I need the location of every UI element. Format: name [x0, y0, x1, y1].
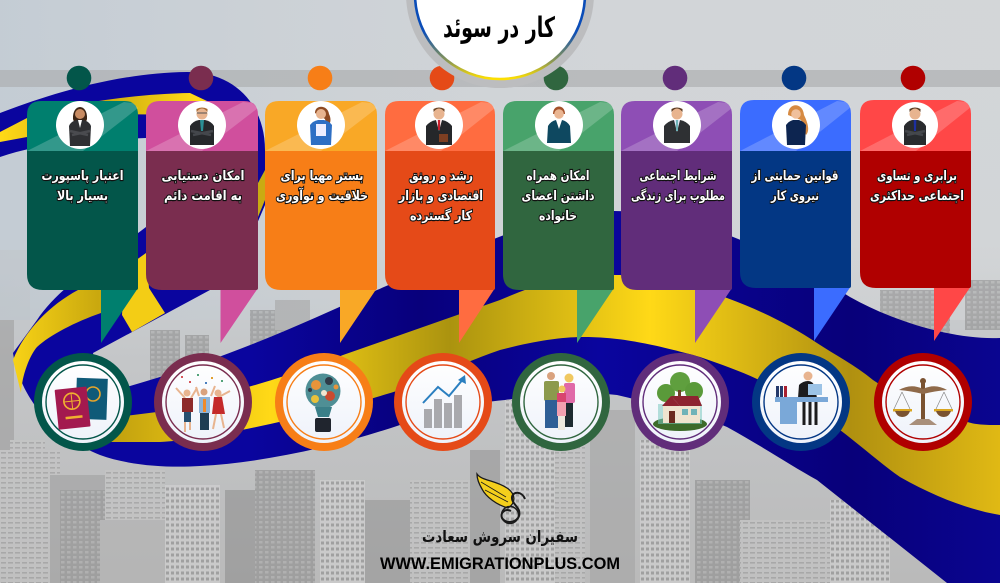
avatar	[178, 101, 226, 149]
background: city skyline	[0, 250, 1000, 583]
label: اعتبار پاسپورت	[42, 169, 124, 184]
avatar	[535, 101, 583, 149]
title badge	[406, 0, 594, 88]
label	[631, 169, 725, 204]
icon circle: idea lightbulb	[275, 353, 373, 451]
card 6: social conditions	[621, 101, 732, 343]
card 8: social equality	[860, 100, 971, 341]
card 1: passport credibility	[27, 101, 138, 343]
label	[870, 169, 964, 204]
icon circle: family	[512, 353, 610, 451]
label: خانواده	[539, 209, 577, 224]
label: به اقامت دائم	[164, 189, 242, 204]
label: مطلوب برای زندگی	[631, 188, 725, 204]
icon circle: passports	[34, 353, 132, 451]
label	[398, 169, 483, 224]
avatar	[297, 101, 345, 149]
gray timeline bar	[0, 70, 1000, 87]
avatar	[892, 102, 938, 148]
label: اقتصادی و بازار	[398, 189, 483, 204]
label: کار گسترده	[410, 208, 472, 224]
icon circle: growth chart	[394, 353, 492, 451]
title: کار در سوئد	[443, 11, 555, 44]
label	[751, 169, 838, 204]
label: بستر مهیا برای	[280, 169, 364, 184]
icon circle: house and trees	[631, 353, 729, 451]
ribbon: yellow right of lobe	[258, 170, 265, 217]
avatar	[56, 101, 104, 149]
avatar	[415, 101, 463, 149]
label	[522, 169, 595, 224]
label: امکان همراه	[526, 169, 590, 184]
icon circle: scales of justice	[874, 353, 972, 451]
label: داشتن اعضای	[522, 189, 595, 204]
label	[276, 169, 368, 204]
label: شرایط اجتماعی	[640, 169, 716, 184]
card 7: labor protection laws	[740, 100, 851, 341]
card 3: creativity and innovation	[265, 101, 377, 343]
ribbon: yellow fold	[122, 253, 165, 332]
icon circle: celebrating people	[154, 353, 252, 451]
label: بسیار بالا	[57, 189, 108, 204]
ribbon: yellow main stripe	[110, 275, 1000, 515]
card 4: economic growth	[385, 101, 495, 343]
label: خلاقیت و نوآوری	[276, 187, 368, 204]
icon circle: office worker	[752, 353, 850, 451]
timeline dots	[67, 66, 925, 90]
label: رشد و رونق	[409, 169, 473, 184]
avatar	[653, 101, 701, 149]
label	[162, 169, 244, 204]
label: اجتماعی حداکثری	[870, 189, 964, 204]
label: برابری و تساوی	[877, 169, 957, 184]
ribbon: yellow loop	[13, 285, 105, 393]
label: امکان دستیابی	[162, 169, 244, 184]
avatar	[772, 101, 820, 149]
card 2: permanent residency	[146, 101, 258, 343]
ribbon: yellow upper stripe	[0, 93, 207, 142]
label: نیروی کار	[770, 189, 819, 204]
label	[42, 169, 124, 204]
logo: winged emblem	[477, 474, 525, 524]
card 5: family accompaniment	[503, 101, 614, 343]
label: قوانین حمایتی از	[751, 169, 838, 184]
website address: WWW.EMIGRATIONPLUS.COM	[380, 554, 620, 573]
logo: company name: سفیران سروش سعادت	[422, 527, 578, 546]
